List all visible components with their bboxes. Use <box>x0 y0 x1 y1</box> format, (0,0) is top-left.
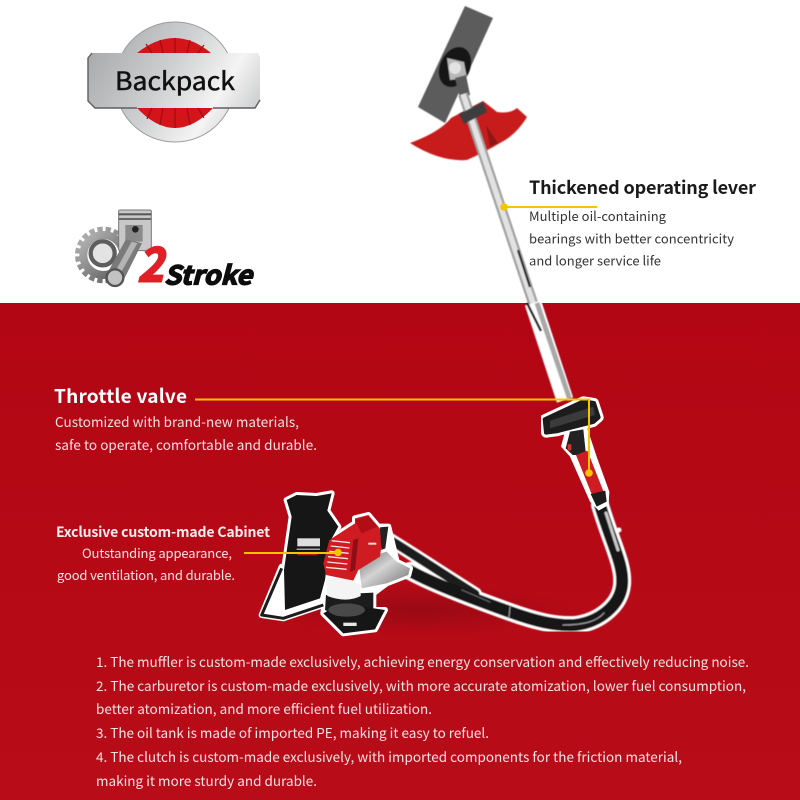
backpack engine unit <box>262 493 410 633</box>
red engine cover <box>323 515 383 581</box>
panel: red lower background <box>0 303 800 800</box>
callout line: throttle valve <box>195 400 593 477</box>
operating lever shaft <box>459 94 570 400</box>
text block: numbered feature list: 2. The carburetor is custom-made exclusively, with more accurate atomization, lower fuel consumption, <box>96 675 746 695</box>
text block: thickened operating lever: and longer service life <box>529 250 661 270</box>
badge: Backpack: Backpack <box>115 62 235 98</box>
cutter head: blade and guard <box>410 6 527 160</box>
text block: thickened operating lever: Thickened operating lever <box>529 174 756 200</box>
text block: custom-made cabinet: Outstanding appearance, <box>82 543 232 562</box>
text block: throttle valve: safe to operate, comfortable and durable. <box>55 434 317 454</box>
text block: thickened operating lever: bearings with better concentricity <box>529 228 734 248</box>
text block: numbered feature list: 3. The oil tank is made of imported PE, making it easy to refuel. <box>96 722 489 742</box>
engine mount and base plate <box>323 593 385 633</box>
badge: Backpack <box>88 22 260 142</box>
callout line: operating lever <box>500 203 597 211</box>
text block: custom-made cabinet: good ventilation, and durable. <box>57 565 235 584</box>
bag logo <box>297 538 320 555</box>
text block: throttle valve: Customized with brand-new materials, <box>55 411 299 431</box>
backpack bag <box>284 493 338 610</box>
text block: throttle valve <box>54 382 317 454</box>
flexible hoses <box>390 505 622 625</box>
icon: 2 Stroke engine logo: 2 <box>137 227 167 296</box>
white halo silhouette <box>262 493 410 633</box>
icon: 2 Stroke engine logo: Stroke <box>164 256 254 293</box>
text block: numbered feature list: 4. The clutch is custom-made exclusively, with imported components for the friction material, <box>96 746 682 766</box>
text block: numbered feature list: making it more sturdy and durable. <box>96 770 317 790</box>
text block: numbered feature list <box>96 651 749 790</box>
throttle handle <box>545 401 609 511</box>
clutch housing <box>358 552 410 588</box>
text block: throttle valve: Throttle valve <box>54 382 187 409</box>
icon: 2 Stroke engine logo <box>79 210 254 296</box>
fuel tank <box>326 578 361 600</box>
text block: numbered feature list: better atomization, and more efficient fuel utilization. <box>96 698 432 718</box>
text block: thickened operating lever <box>529 174 756 270</box>
text block: thickened operating lever: Multiple oil-containing <box>529 206 667 225</box>
backpack leg frame <box>262 568 323 618</box>
callout line: cabinet <box>244 549 342 556</box>
text block: custom-made cabinet: Exclusive custom-made Cabinet <box>56 522 270 542</box>
text block: numbered feature list: 1. The muffler is custom-made exclusively, achieving energy conservation and effectively reducing noise. <box>96 651 749 671</box>
text block: custom-made cabinet <box>56 522 270 584</box>
